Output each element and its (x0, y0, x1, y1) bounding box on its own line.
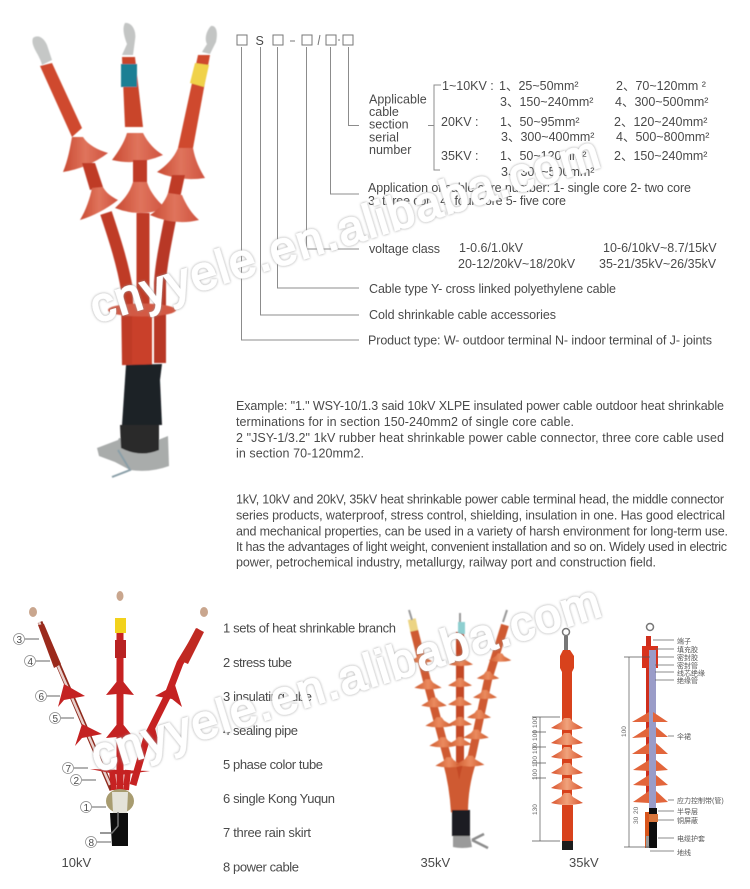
component labels: 密封胶 (677, 653, 698, 662)
leader lines (242, 47, 441, 340)
core number description: Application of cable core number: 1- single core 2- two core (368, 181, 691, 195)
watermark: top: cnyyele.en.alibaba.com (83, 125, 605, 333)
voltage class: 35-21/35kV~26/35kV (599, 257, 717, 271)
type code legend: serial (369, 130, 399, 144)
parts list: 4 sealing pipe (223, 723, 298, 738)
right arm (150, 26, 217, 222)
component labels (677, 636, 724, 857)
component labels: 填充胶 (677, 645, 698, 654)
cutaway drawing (632, 624, 668, 848)
section table: 1、50~95mm² (500, 115, 580, 129)
dimension lines (532, 717, 560, 841)
caption: 10kV (62, 855, 91, 870)
code letter: S (256, 34, 264, 48)
component labels: 应力控制带(管) (677, 796, 724, 805)
part number callouts: 8 (88, 838, 94, 849)
caption: 35kV (420, 855, 450, 870)
terminal drawing (29, 591, 208, 846)
drawing: cutaway with labels (621, 624, 724, 857)
product type: Product type: W- outdoor terminal N- indoor terminal of J- joints (368, 334, 712, 348)
section table: 2、120~240mm² (614, 115, 707, 129)
section table: 20KV : (441, 115, 479, 129)
section table: 1、50~120mm² (500, 149, 586, 163)
parts list: 8 power cable (223, 860, 299, 874)
voltage class (369, 241, 717, 271)
part number callouts: 4 (28, 657, 34, 668)
section table: 3、150~240mm² (500, 95, 593, 109)
component labels: 电缆护套 (677, 834, 705, 843)
core number description (368, 181, 691, 208)
component labels: 半导层 (677, 807, 698, 816)
type code legend: section (369, 118, 409, 132)
photo: three-core cable terminal (32, 23, 217, 477)
lower tubes and breakout disc (106, 213, 176, 366)
example paragraph (236, 399, 724, 460)
cable type: Cable type Y- cross linked polyethylene cable (369, 282, 616, 296)
middle arm (112, 23, 166, 213)
component labels: 端子 (677, 636, 691, 646)
part number callouts: 7 (66, 764, 72, 775)
description paragraph (236, 492, 728, 570)
photo: 35kV three-core terminal (408, 610, 511, 870)
section table: 4、300~500mm² (615, 95, 708, 109)
component labels: 铜屏蔽 (677, 816, 698, 825)
core number description: 3- three core 4- four core 5- five core (368, 194, 566, 208)
voltage class: voltage class (369, 242, 440, 256)
parts list: 5 phase color tube (223, 757, 323, 772)
parts list: 7 three rain skirt (223, 825, 311, 840)
left arm (32, 36, 118, 220)
component labels: 地线 (677, 848, 691, 857)
description paragraph: power, petrochemical industry, metallurgy, railway port and construction field. (236, 556, 656, 570)
component labels: 线芯绝缘 (677, 668, 705, 678)
example paragraph: Example: "1." WSY-10/1.3 said 10kV XLPE insulated power cable outdoor heat shrinkable (236, 399, 724, 413)
part number callouts: 1 (84, 803, 90, 814)
part number callouts (14, 634, 111, 849)
parts list (223, 620, 396, 874)
section table: 3、300~400mm² (501, 130, 594, 144)
ground braid (97, 425, 169, 477)
diagram: 10kV terminal (14, 591, 208, 870)
description paragraph: series products, waterproof, stress control, shielding, insulation in one. Has good electrical (236, 508, 725, 522)
parts list: 1 sets of heat shrinkable branch (223, 620, 396, 636)
section table (441, 79, 709, 179)
accessories: Cold shrinkable cable accessories (369, 308, 556, 322)
dimension lines: 30 (633, 816, 640, 824)
parts list: 6 single Kong Yuqun (223, 791, 335, 806)
type code legend (237, 34, 717, 348)
part number callouts: 6 (38, 692, 44, 703)
description paragraph: It has the advantages of light weight, convenient installation and so on. Widely used in electric (236, 540, 727, 554)
code boxes (237, 35, 353, 45)
section table: 2、150~240mm² (614, 149, 707, 163)
caption: 35kV (569, 855, 599, 870)
black sealing wrap (122, 364, 162, 425)
part number callouts: 2 (74, 776, 80, 787)
label leader lines (650, 640, 674, 851)
terminal drawing (408, 610, 511, 848)
section table: 1~10KV : (442, 79, 494, 93)
part number callouts: 5 (52, 714, 58, 725)
type code legend: cable (369, 105, 399, 119)
terminal drawing (551, 628, 583, 850)
section table: 4、500~800mm² (616, 130, 709, 144)
serial number label: Applicable (369, 92, 427, 106)
watermark: bottom: cnyyele.en.alibaba.com (84, 574, 606, 782)
section table: 35KV : (441, 149, 479, 163)
dimension lines: 100 100 100 100 100 (532, 717, 539, 780)
component labels: 绝缘管 (677, 676, 698, 685)
component labels: 密封管 (677, 661, 698, 670)
dimension lines: 100 (621, 726, 628, 737)
voltage class: 1-0.6/1.0kV (459, 241, 524, 255)
part number callouts: 3 (16, 635, 22, 646)
description paragraph: 1kV, 10kV and 20kV, 35kV heat shrinkable power cable terminal head, the middle connector (236, 492, 724, 506)
dimension lines: 20 (633, 806, 640, 814)
example paragraph: 2 "JSY-1/3.2" 1kV rubber heat shrinkable power cable connector, three core cable used (236, 431, 724, 445)
parts list: 3 insulating tube (223, 689, 312, 704)
section table: 3、300~500mm² (501, 165, 594, 179)
example paragraph: terminations for in section 150-240mm2 of single core cable. (236, 415, 574, 429)
example paragraph: in section 70-120mm2. (236, 446, 364, 460)
dimension lines: 130 (532, 804, 539, 815)
component labels: 伞裙 (677, 732, 691, 741)
parts list: 2 stress tube (223, 655, 292, 670)
dimension lines (621, 657, 650, 847)
section table: 2、70~120mm ² (616, 79, 706, 93)
voltage class: 20-12/20kV~18/20kV (458, 257, 576, 271)
drawing: 35kV terminal dimensions (532, 628, 599, 870)
section table: 1、25~50mm² (499, 79, 579, 93)
type code legend: number (369, 143, 411, 157)
description paragraph: and mechanical properties, can be used in a variety of harsh environment for long-term use. (236, 524, 728, 538)
voltage class: 10-6/10kV~8.7/15kV (603, 241, 717, 255)
